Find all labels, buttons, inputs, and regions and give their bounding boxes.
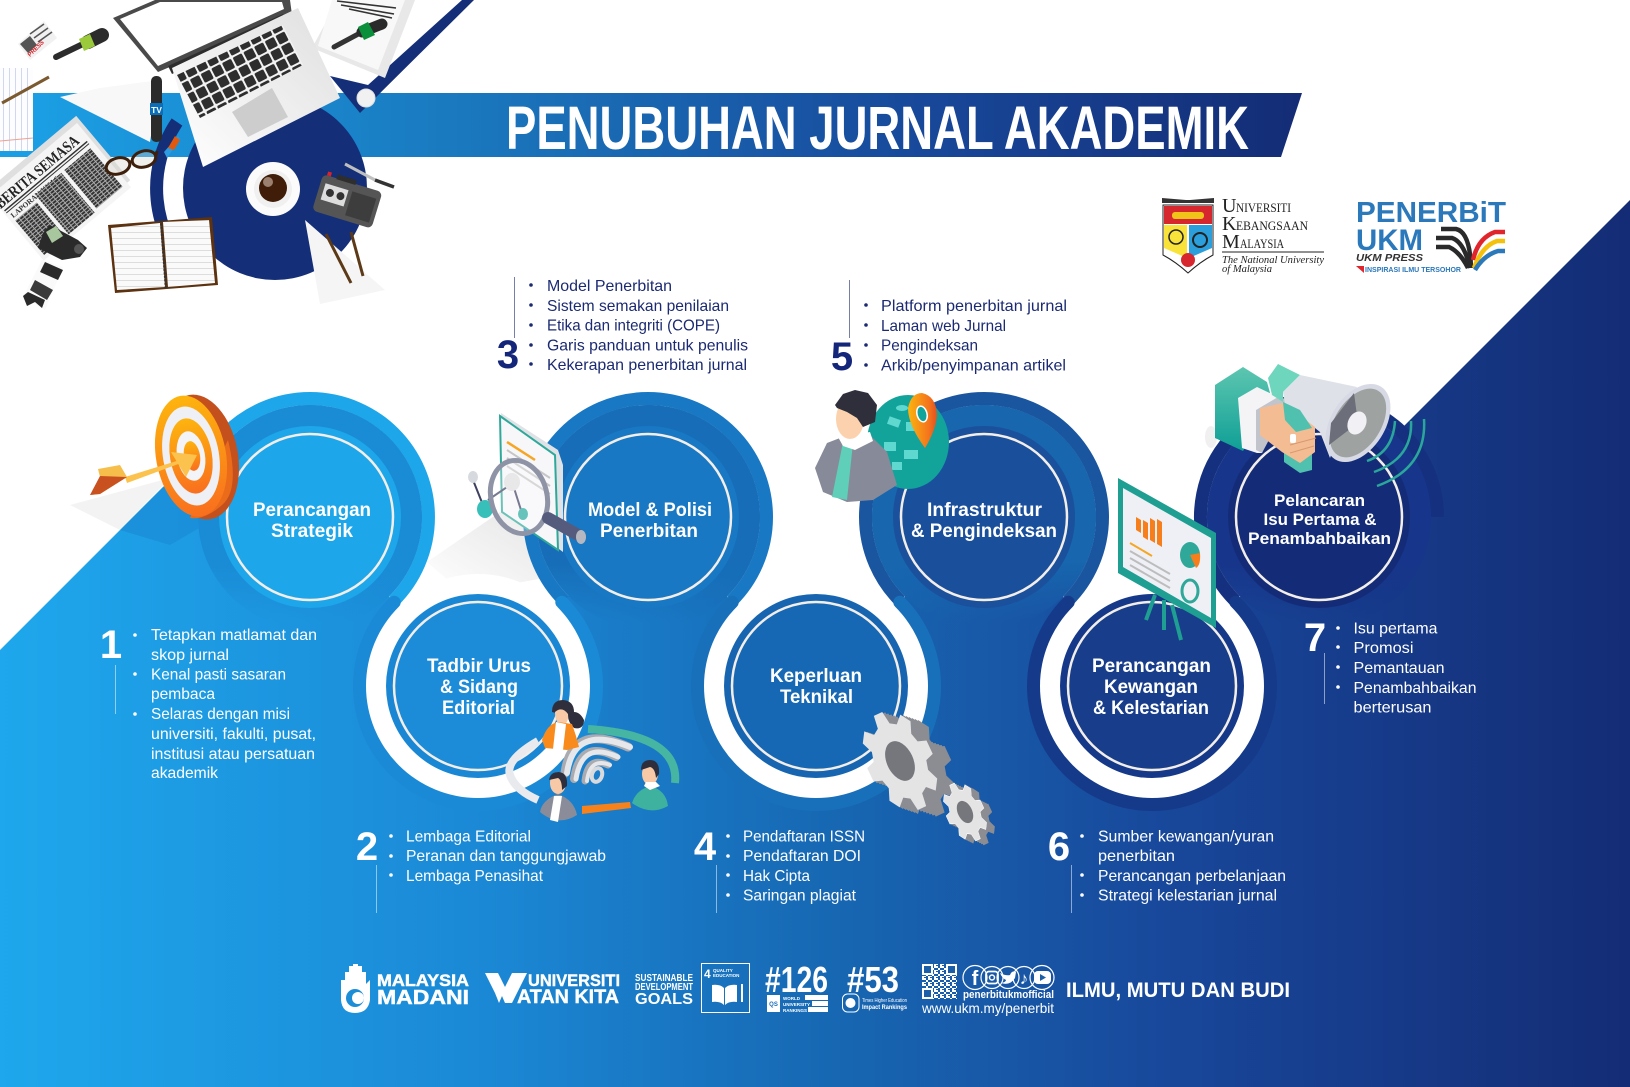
step 6 text [1048, 825, 1286, 913]
right paper with microphone [312, 0, 415, 78]
QR code [922, 964, 957, 999]
step 7 text: berterusan [1354, 700, 1432, 716]
eraser [164, 136, 180, 158]
woman [542, 700, 584, 750]
paper sheet behind [60, 80, 160, 142]
QS ranking 126: QS [769, 1002, 778, 1008]
university name [1222, 195, 1324, 275]
university name: M [1222, 231, 1240, 253]
icon: target with arrow [90, 388, 248, 526]
step 1 circle: Perancangan Strategik: Perancangan [253, 500, 371, 521]
step 3 text: Etika dan integriti (COPE) [547, 318, 720, 335]
QS ranking 126: UNIVERSITY [783, 1002, 810, 1007]
THE impact ranking 53: Impact Rankings [862, 1005, 908, 1011]
step 1 circle: Perancangan Strategik: Strategik [271, 521, 353, 542]
newspaper: LAPORAN KHAS [9, 174, 61, 220]
step 3 circle: Model & Polisi Penerbitan [530, 399, 766, 629]
step 1 circle: Perancangan Strategik [198, 399, 428, 629]
newspaper [0, 116, 134, 261]
icon: document with magnifier [468, 413, 586, 552]
hand [1260, 402, 1316, 463]
step 6 text: 6 [1048, 825, 1070, 869]
green microphone [56, 34, 102, 57]
step 2 text: Peranan dan tanggungjawab [406, 848, 606, 865]
navy diagonal strip [330, 0, 474, 113]
step 5 text: Pengindeksan [881, 338, 978, 354]
step 2 circle: Tadbir Urus & Sidang Editorial [360, 574, 596, 804]
university name: The National University [1222, 254, 1324, 266]
desk illustration [0, 0, 474, 310]
step 2 circle: Tadbir Urus & Sidang Editorial: Editorial [442, 698, 515, 719]
logo: Penerbit UKM: UKM [1356, 224, 1423, 257]
press badge: PRESS [27, 40, 46, 58]
step 6 text: Sumber kewangan/yuran [1098, 828, 1274, 846]
step 6 circle: Perancangan Kewangan & Kelestarian [1033, 574, 1270, 804]
university name: ALAYSIA [1240, 236, 1284, 251]
step 4 text: Hak Cipta [743, 868, 810, 885]
step 7 circle: Pelancaran Isu Pertama & Penambahbaikan [1200, 399, 1438, 629]
SDG 4 quality education: QUALITY [713, 968, 733, 973]
step 4 circle: Keperluan Teknikal: Keperluan [770, 666, 862, 687]
glasses [104, 148, 158, 177]
logo: Malaysia Madani: MADANI [377, 987, 469, 1009]
icon: megaphone [1205, 364, 1424, 486]
step 1 text: Selaras dengan misi [151, 706, 290, 723]
step 6 circle: Perancangan Kewangan & Kelestarian: Perancangan [1092, 656, 1211, 677]
magnifier shadow [427, 512, 560, 593]
SDG 4 quality education [702, 964, 750, 1012]
step 1 text: pembaca [151, 686, 215, 703]
paper with pencils [305, 220, 385, 304]
step 7 circle: Pelancaran Isu Pertama & Penambahbaikan: Penambahbaikan [1248, 529, 1391, 548]
title: PENUBUHAN JURNAL AKADEMIK [506, 94, 1249, 162]
motto: ILMU, MUTU DAN BUDI [1066, 979, 1290, 1002]
megaphone cone [1268, 364, 1300, 402]
step 4 text: Pendaftaran DOI [743, 848, 861, 865]
THE impact ranking 53: #53 [847, 959, 899, 1000]
step 4 text: 4 [694, 825, 717, 869]
university name: of Malaysia [1222, 263, 1272, 275]
target shadow on blue [120, 487, 235, 545]
step 1 text: universiti, fakulti, pusat, [151, 726, 316, 743]
TV microphone [150, 76, 163, 142]
university name: EBANGSAAN [1236, 218, 1309, 233]
step 3 circle: Model & Polisi Penerbitan: Penerbitan [600, 521, 698, 542]
logo: Universiti Watan Kita [485, 971, 620, 1008]
logo: Penerbit UKM: UKM PRESS [1356, 252, 1423, 264]
SDG 4 quality education: 4 [704, 967, 711, 981]
logo: Penerbit UKM: PENERBiT [1356, 197, 1506, 229]
paper clip [357, 89, 375, 107]
icon: presentation board [1118, 478, 1216, 640]
step 1 text: skop jurnal [151, 647, 229, 664]
QS ranking 126 [765, 959, 828, 1013]
step 6 circle: Perancangan Kewangan & Kelestarian: Kewangan [1104, 677, 1198, 698]
step 3 text [497, 277, 748, 377]
step 2 circle: Tadbir Urus & Sidang Editorial: Tadbir Urus [427, 656, 531, 677]
step 1 text: Tetapkan matlamat dan [151, 627, 317, 644]
step 6 text: Perancangan perbelanjaan [1098, 868, 1286, 885]
social media icons: f [972, 968, 979, 990]
step 4 circle: Keperluan Teknikal: Teknikal [780, 687, 853, 708]
step 7 text: Pemantauan [1354, 660, 1444, 677]
TV microphone: TV [151, 105, 162, 115]
step 2 circle: Tadbir Urus & Sidang Editorial: & Sidang [440, 677, 518, 698]
step 3 circle: Model & Polisi Penerbitan: Model & Polisi [588, 500, 712, 521]
pen [345, 164, 394, 187]
navy disc with ring [157, 96, 367, 280]
step 1 text: 1 [100, 623, 122, 667]
logo: Sustainable Development Goals: DEVELOPMENT [635, 982, 693, 993]
step 5 text: Laman web Jurnal [881, 318, 1006, 335]
step 4 circle: Keperluan Teknikal [698, 574, 934, 804]
QS ranking 126: WORLD [783, 996, 801, 1001]
step 1 text [100, 623, 317, 782]
footer logos [341, 959, 1290, 1016]
step 7 circle: Pelancaran Isu Pertama & Penambahbaikan: Pelancaran [1274, 491, 1365, 510]
logo: Penerbit UKM: INSPIRASI ILMU TERSOHOR [1365, 265, 1462, 274]
camera [23, 225, 87, 310]
QS ranking 126: RANKINGS [783, 1008, 807, 1013]
step 5 circle: Infrastruktur & Pengindeksan: & Pengindeksan [911, 521, 1057, 542]
step 7 text [1304, 616, 1476, 716]
laptop [113, 0, 340, 167]
THE impact ranking 53: Times Higher Education [862, 998, 907, 1004]
step 1 text: institusi atau persatuan [151, 746, 315, 763]
logo: Malaysia Madani: MALAYSIA [377, 971, 469, 990]
step 7 circle: Pelancaran Isu Pertama & Penambahbaikan: Isu Pertama & [1264, 510, 1376, 529]
step 5 circle: Infrastruktur & Pengindeksan: Infrastruktur [927, 500, 1043, 521]
step 2 text [356, 825, 606, 913]
icon: team network [509, 700, 675, 822]
university name: U [1222, 195, 1237, 217]
step 3 text: 3 [497, 333, 519, 377]
university name: K [1222, 213, 1237, 235]
step 3 text: Model Penerbitan [547, 278, 672, 295]
step 7 text: Isu pertama [1354, 621, 1438, 638]
teal arrow arc [588, 729, 675, 783]
step 4 text: Saringan plagiat [743, 888, 857, 905]
website: www.ukm.my/penerbit [921, 1000, 1054, 1016]
step 5 text: 5 [831, 335, 853, 379]
social media icons [963, 966, 1054, 990]
step 5 text: Arkib/penyimpanan artikel [881, 358, 1066, 374]
step 6 text: penerbitan [1098, 848, 1175, 865]
step 1 text: Kenal pasti sasaran [151, 666, 286, 684]
title banner [0, 93, 1302, 162]
logo: Malaysia Madani [341, 964, 469, 1013]
step 6 circle: Perancangan Kewangan & Kelestarian: & Kelestarian [1093, 698, 1209, 719]
book stripes icon [1436, 229, 1505, 270]
logo: Sustainable Development Goals: GOALS [635, 991, 693, 1008]
handle [1284, 450, 1312, 473]
step 6 text: Strategi kelestarian jurnal [1098, 888, 1277, 905]
social handle: penerbitukmofficial [963, 989, 1054, 1001]
step 3 text: Garis panduan untuk penulis [547, 337, 748, 354]
step 5 text: Platform penerbitan jurnal [881, 298, 1067, 315]
logo: Universiti Watan Kita: ATAN KITA [517, 987, 619, 1008]
crest [1162, 198, 1214, 273]
logo: Penerbit UKM [1356, 197, 1506, 274]
press badge [18, 21, 57, 60]
step 4 text [694, 825, 865, 913]
step 3 text: Kekerapan penerbitan jurnal [547, 357, 747, 374]
social media icons: ♪ [1020, 969, 1028, 988]
logo: Universiti Watan Kita: UNIVERSITI [528, 971, 620, 990]
orange bar [582, 802, 631, 814]
step 1 text: akademik [151, 765, 219, 782]
sleeve [1215, 367, 1272, 451]
white upper area [0, 0, 1630, 686]
QS ranking 126: #126 [765, 959, 828, 1000]
man in teal [632, 760, 668, 810]
notebook [108, 217, 218, 293]
step 7 text: Penambahbaikan [1354, 680, 1476, 697]
logo: Universiti Kebangsaan Malaysia [1162, 195, 1324, 275]
university name: NIVERSITI [1236, 200, 1291, 215]
step 2 text: 2 [356, 825, 378, 869]
target shadow on white [70, 478, 170, 530]
logo: Sustainable Development Goals [635, 973, 693, 1008]
step 7 text: Promosi [1354, 640, 1414, 657]
voice recorder [312, 170, 384, 229]
lined notes and pencil [0, 68, 49, 151]
megaphone mouth [1312, 372, 1404, 474]
wifi symbol [565, 739, 630, 783]
coffee cup [246, 162, 300, 216]
sound waves [1367, 419, 1424, 486]
step 5 text [831, 280, 1067, 379]
icon: gears [848, 700, 1003, 852]
step 2 text: Lembaga Editorial [406, 828, 531, 846]
step 7 text: 7 [1304, 616, 1326, 660]
step 3 text: Sistem semakan penilaian [547, 298, 729, 315]
logo: Sustainable Development Goals: SUSTAINABLE [635, 973, 693, 984]
step 5 circle: Infrastruktur & Pengindeksan [865, 399, 1102, 629]
SDG 4 quality education: EDUCATION [713, 973, 739, 978]
icon: person with globe and pin [815, 390, 949, 502]
white arrow arc [509, 741, 538, 800]
step 2 text: Lembaga Penasihat [406, 868, 544, 885]
man in grey [540, 772, 577, 822]
step 4 text: Pendaftaran ISSN [743, 828, 865, 846]
